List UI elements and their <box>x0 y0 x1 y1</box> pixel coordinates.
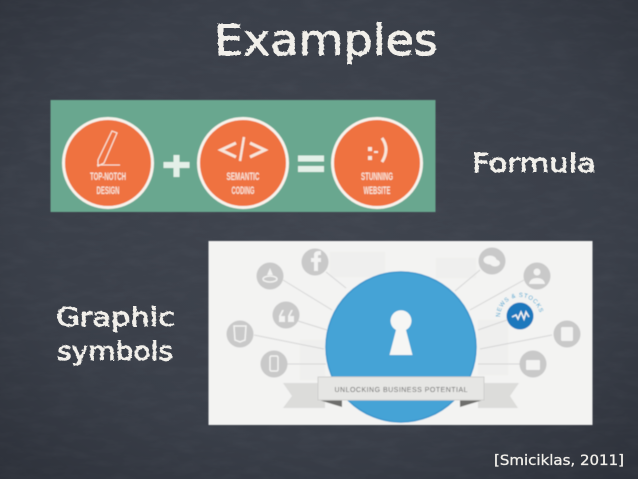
faint background pattern <box>300 252 508 380</box>
label: graphic symbols <box>56 303 175 367</box>
equals sign <box>298 158 324 169</box>
panel: graphic symbols image <box>208 240 594 426</box>
label: graphic symbols: symbols <box>57 337 173 367</box>
label: SEMANTIC <box>226 171 260 183</box>
circle: stunning website: WEBSITE <box>364 185 390 197</box>
panel: formula graphic <box>50 100 436 212</box>
circle: semantic coding: CODING <box>232 185 254 197</box>
icon: code brackets <box>221 137 265 161</box>
icon: news and stocks <box>495 292 544 330</box>
circle: semantic coding <box>198 118 288 208</box>
icon: smiley <box>368 138 386 162</box>
icon: keyhole <box>390 310 412 355</box>
citation: [Smiciklas, 2011] <box>494 453 624 469</box>
icons: grey social circles <box>226 248 580 378</box>
label: graphic symbols: Graphic <box>56 303 175 333</box>
icon glyphs <box>234 251 573 371</box>
banner label: UNLOCKING BUSINESS POTENTIAL <box>334 387 468 394</box>
title: Examples <box>214 16 438 66</box>
big blue circle <box>326 272 476 422</box>
circle: top-notch design: DESIGN <box>96 185 120 197</box>
ribbon banner <box>283 377 519 408</box>
circle: stunning website <box>332 118 422 208</box>
label: STUNNING <box>361 171 393 183</box>
icon: pencil <box>97 131 120 166</box>
label: formula: Formula <box>472 149 596 179</box>
connector lines <box>254 270 552 364</box>
label: TOP-NOTCH <box>90 171 126 183</box>
plus sign <box>164 155 190 177</box>
circle: top-notch design <box>64 118 152 208</box>
icon: news and stocks: NEWS & STOCKS <box>495 292 544 318</box>
